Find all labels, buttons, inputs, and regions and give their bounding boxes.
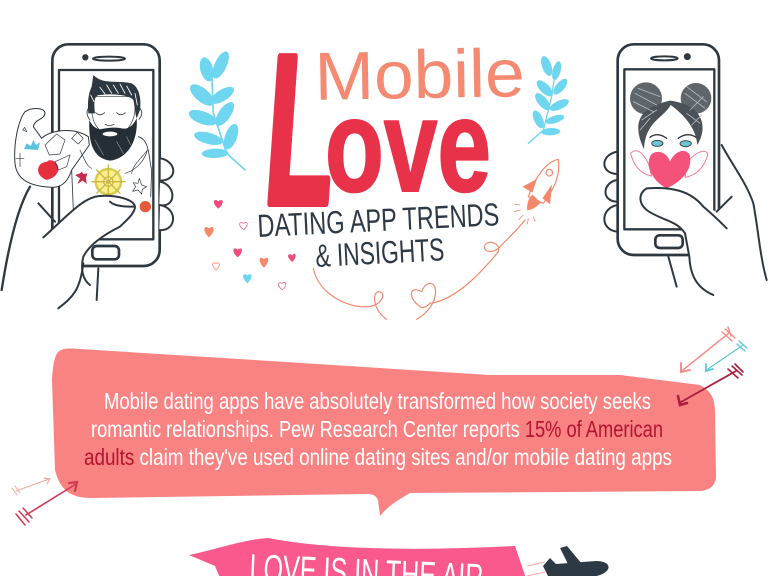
woman portrait (630, 82, 711, 188)
red arrow (16, 482, 77, 525)
title: Mobile Love (259, 11, 525, 248)
faint arrow (12, 478, 50, 495)
arrows top right (678, 327, 747, 405)
banner: love is in the air (189, 538, 530, 576)
cyan arrow (706, 341, 747, 371)
title word: Mobile: Mobile (314, 35, 525, 115)
icon: right blue sprig (528, 55, 571, 143)
icon: airplane towing banner (527, 546, 609, 576)
speech bubble text (84, 388, 672, 470)
hand and thumb (640, 145, 767, 295)
speech bubble text: Mobile dating apps have absolutely transformed how society seeks (104, 388, 651, 414)
arrows bottom left (12, 478, 77, 525)
title word: Love (259, 11, 491, 248)
subtitle: dating app trends and insights: DATING APP TRENDS (257, 196, 500, 244)
speech bubble panel (52, 348, 716, 516)
title word: Love: L (259, 11, 343, 248)
hearts cluster (204, 200, 296, 290)
man portrait (72, 75, 152, 210)
phone body (52, 44, 160, 266)
dark red arrow (678, 364, 743, 405)
title word: Love: ove (325, 72, 491, 219)
rocket trail (313, 220, 525, 319)
tattooed arm (15, 109, 151, 212)
illustration: hand holding phone with woman and winged heart (604, 44, 767, 295)
phone body (604, 44, 719, 255)
icon: rocket (514, 159, 559, 224)
pink arrow (681, 327, 735, 372)
subtitle: dating app trends and insights: & INSIGHTS (314, 231, 445, 274)
hand and fingers (2, 158, 173, 308)
subtitle: dating app trends and insights (257, 196, 500, 274)
illustration: hand holding phone with tattooed man (2, 44, 173, 308)
icon: left blue sprig (186, 49, 245, 170)
speech bubble text: romantic relationships. Pew Research Center reports 15% of American (91, 416, 663, 442)
decoration group: sprigs, hearts and rocket (186, 49, 571, 319)
